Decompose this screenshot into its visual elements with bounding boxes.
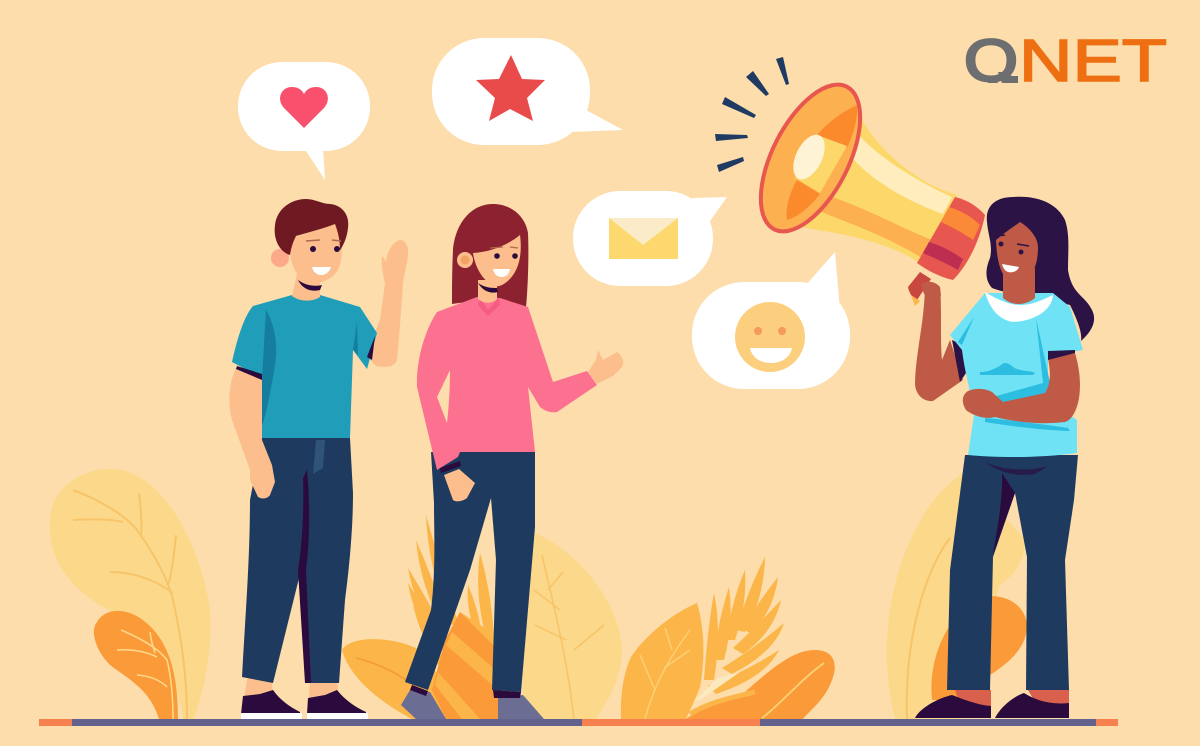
megaphone: horn <box>785 110 957 263</box>
woman: hair back <box>452 204 528 308</box>
speech bubble: heart <box>238 62 370 180</box>
presenter: face <box>996 222 1038 281</box>
presenter: jeans <box>947 455 1078 690</box>
ground line <box>39 719 1118 726</box>
woman: head <box>457 235 521 303</box>
man: t-shirt <box>232 295 377 438</box>
megaphone: striped band <box>917 197 985 280</box>
logo: QNET: Q <box>964 28 1018 94</box>
man: ankles and shoes <box>241 675 368 719</box>
megaphone <box>740 69 985 306</box>
logo: QNET: NET <box>1019 28 1167 94</box>
megaphone: mouth rim <box>740 69 881 247</box>
icon: envelope <box>609 218 678 259</box>
megaphone: inner cone <box>787 105 857 220</box>
presenter: shoes and socks <box>915 690 1069 718</box>
presenter: dark sleeve and torso shadow <box>952 340 968 382</box>
man: waving arm <box>368 240 408 367</box>
presenter: folded arm and hand <box>963 353 1080 423</box>
plant: orange leaves and fern behind centre woman <box>342 515 622 719</box>
figure: man in teal t-shirt <box>229 199 408 719</box>
woman: socks <box>410 685 521 698</box>
man: head <box>271 199 348 301</box>
woman: lower hand and watch <box>440 461 475 501</box>
presenter: hair <box>986 197 1094 341</box>
presenter: raised arm <box>915 283 963 401</box>
plant: large yellow leaf, far left <box>50 469 210 719</box>
figure: woman in pink shirt <box>401 204 623 719</box>
woman: shoes <box>401 690 544 719</box>
presenter: neck and collar <box>985 268 1053 322</box>
presenter: hand on handle <box>921 282 941 296</box>
icon: star <box>476 55 545 121</box>
figure: woman with megaphone <box>915 197 1094 718</box>
plant: yellow and orange leaves behind right woman <box>887 472 1027 719</box>
icon: sound lines <box>715 57 789 172</box>
presenter: blouse <box>950 293 1083 457</box>
man: jeans <box>242 438 353 683</box>
megaphone: handle <box>908 272 931 306</box>
plant: small orange leaf, far left <box>94 611 178 719</box>
logo: QNET <box>966 38 1166 83</box>
man: lower arm and hand <box>229 368 275 498</box>
speech bubble: envelope <box>573 191 727 286</box>
speech bubble: smiley <box>692 252 850 389</box>
woman: right hand <box>588 350 623 384</box>
woman: jeans <box>405 452 535 692</box>
icon: heart <box>280 87 328 128</box>
woman: pink shirt <box>417 297 597 470</box>
icon: smiley face <box>735 302 805 372</box>
speech bubble: star <box>432 38 623 145</box>
plant: orange leaves and fern at centre right <box>621 557 835 719</box>
